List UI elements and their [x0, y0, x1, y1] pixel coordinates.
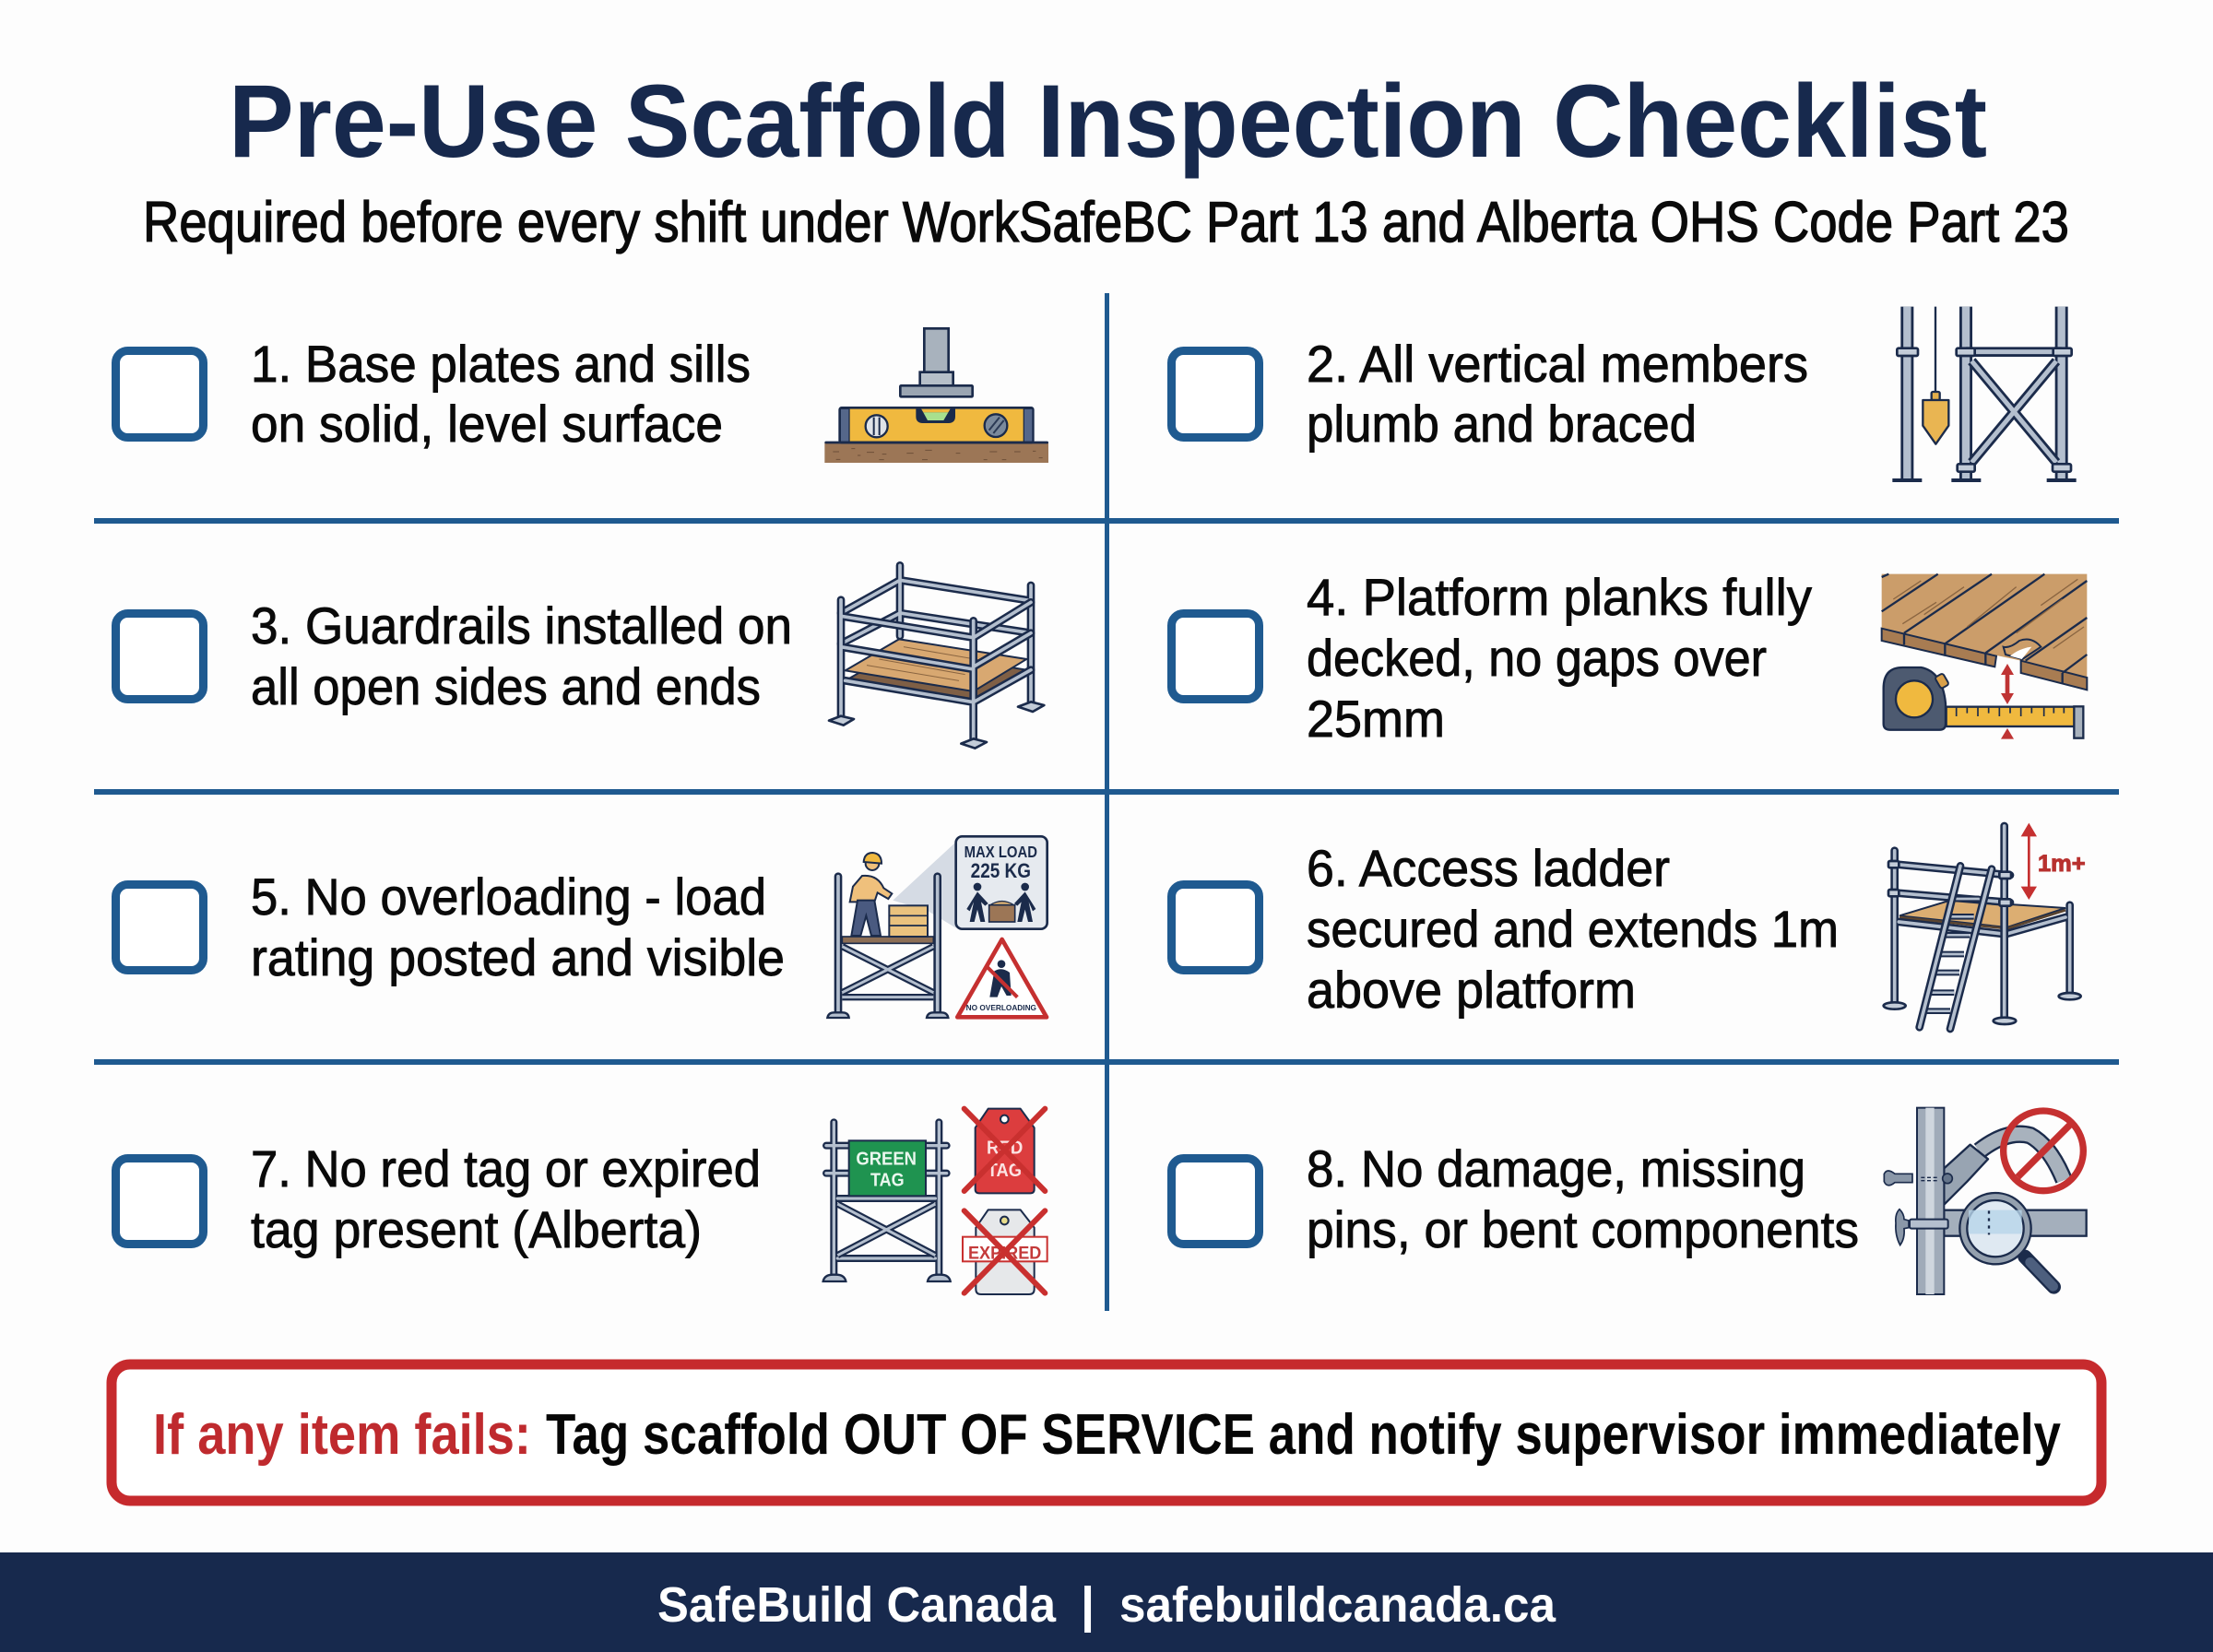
checkbox 8 [1171, 1158, 1260, 1245]
text: item 3 [251, 596, 792, 715]
callout lead-in: If any item fails: [153, 1403, 531, 1467]
checkbox 2 [1171, 350, 1260, 437]
checkbox 6 [1171, 885, 1260, 970]
callout: failure instruction [112, 1364, 2101, 1501]
text: item 2: plumb and braced [1307, 395, 1697, 453]
checkbox 3 [116, 614, 203, 699]
text: item 5: 5. No overloading - load [251, 867, 766, 926]
panel: item 5 [116, 836, 1047, 1018]
icon: green tag, crossed red and expired tags: TAG [988, 1160, 1022, 1181]
callout box [112, 1364, 2101, 1501]
icon: guardrail scaffold [829, 565, 1044, 749]
text: item 4: 25mm [1307, 690, 1445, 748]
text: item 1: on solid, level surface [251, 395, 723, 453]
panel: item 2 [1171, 307, 2077, 480]
panel: item 6 [1171, 823, 2086, 1029]
icon: plank gap and tape measure [1882, 574, 2087, 739]
panel: item 8 [1171, 1108, 2087, 1294]
text: item 6: secured and extends 1m [1307, 900, 1839, 958]
footer band [0, 1552, 2213, 1652]
icon: ladder extending above platform: 1m+ [2038, 851, 2086, 877]
footer background [0, 1552, 2213, 1652]
icon: overloaded scaffold and max load sign: 225 KG [971, 859, 1031, 882]
text: item 4 [1307, 568, 1812, 748]
text: item 7: 7. No red tag or expired [251, 1139, 761, 1198]
footer separator: | [1081, 1577, 1095, 1634]
icon: overloaded scaffold and max load sign: NO OVERLOADING [966, 1003, 1036, 1012]
text: item 5 [251, 867, 785, 986]
text: item 3: all open sides and ends [251, 657, 761, 715]
text: item 8: pins, or bent components [1307, 1200, 1859, 1258]
text: item 6 [1307, 839, 1839, 1019]
text: item 7: tag present (Alberta) [251, 1200, 702, 1258]
icon: ladder extending above platform [1884, 823, 2086, 1029]
footer website: safebuildcanada.ca [1119, 1577, 1556, 1633]
panel: item 3 [116, 565, 1044, 749]
text: item 5: rating posted and visible [251, 928, 785, 986]
icon: green tag, crossed red and expired tags: GREEN [856, 1148, 917, 1169]
text: item 8 [1307, 1139, 1859, 1258]
text: item 7 [251, 1139, 761, 1258]
icon: green tag, crossed red and expired tags: EXPIRED [968, 1244, 1041, 1263]
text: item 8: 8. No damage, missing [1307, 1139, 1805, 1198]
checkbox 4 [1171, 614, 1260, 699]
footer brand: SafeBuild Canada [657, 1577, 1057, 1633]
text: item 1: 1. Base plates and sills [251, 335, 751, 393]
text: item 2: 2. All vertical members [1307, 335, 1808, 393]
icon: green tag, crossed red and expired tags [823, 1109, 1047, 1294]
panel: item 7 [116, 1109, 1047, 1294]
text: item 2 [1307, 335, 1808, 453]
text: item 1 [251, 335, 751, 453]
icon: overloaded scaffold and max load sign [827, 836, 1047, 1018]
icon: overloaded scaffold and max load sign: MAX LOAD [964, 843, 1037, 861]
checkbox 7 [116, 1158, 203, 1245]
panel: item 4 [1171, 568, 2087, 748]
text: item 6: above platform [1307, 961, 1636, 1019]
text: item 3: 3. Guardrails installed on [251, 596, 792, 655]
icon: plumb bob and braced frame [1892, 307, 2077, 480]
checkbox 5 [116, 885, 203, 970]
text: item 6: 6. Access ladder [1307, 839, 1670, 897]
text: item 4: 4. Platform planks fully [1307, 568, 1812, 626]
text: item 4: decked, no gaps over [1307, 629, 1767, 687]
icon: green tag, crossed red and expired tags: RED [987, 1138, 1023, 1159]
panel: item 1 [116, 328, 1048, 463]
title: Pre-Use Scaffold Inspection Checklist [229, 64, 1987, 179]
icon: green tag, crossed red and expired tags: TAG [870, 1170, 905, 1191]
icon: level under base plate [824, 328, 1048, 463]
icon: bent pipe, missing pins, magnifier [1884, 1108, 2087, 1294]
checkbox 1 [116, 350, 203, 437]
